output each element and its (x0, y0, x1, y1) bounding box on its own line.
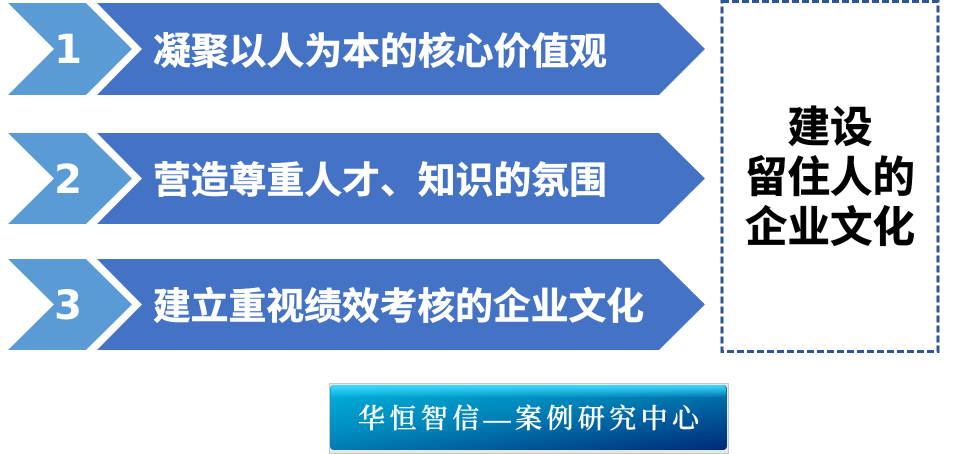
row 3: 建立重视绩效考核的企业文化 (8, 259, 705, 350)
number 1: 1 (54, 27, 82, 73)
number 2: 2 (54, 157, 82, 203)
chevron: number 2 (8, 133, 132, 224)
number 3: 3 (54, 283, 82, 329)
banner text 3: 建立重视绩效考核的企业文化 (153, 286, 644, 327)
panel: dashed summary box (722, 2, 938, 352)
button outer dotted frame (330, 384, 728, 454)
banner text 2: 营造尊重人才、知识的氛围 (153, 160, 607, 201)
dashed border (722, 2, 938, 352)
button body (330, 385, 727, 450)
row 2: 营造尊重人才、知识的氛围 (8, 133, 705, 224)
chevron: number 3 (8, 259, 132, 350)
summary text: 建设 (787, 105, 873, 152)
summary text: 企业文化 (745, 205, 915, 252)
button label: 华恒智信—案例研究中心 (358, 404, 701, 434)
arrow banner 1 (97, 3, 705, 95)
summary text (745, 105, 915, 252)
summary text: 留住人的 (745, 155, 915, 202)
arrow banner 2 (97, 133, 705, 224)
row 1: 凝聚以人为本的核心价值观 (8, 3, 705, 95)
button highlight (331, 385, 726, 398)
arrow banner 3 (97, 259, 705, 350)
chevron: number 1 (8, 3, 132, 95)
button: 华恒智信—案例研究中心 (330, 384, 728, 454)
banner text 1: 凝聚以人为本的核心价值观 (153, 31, 607, 72)
